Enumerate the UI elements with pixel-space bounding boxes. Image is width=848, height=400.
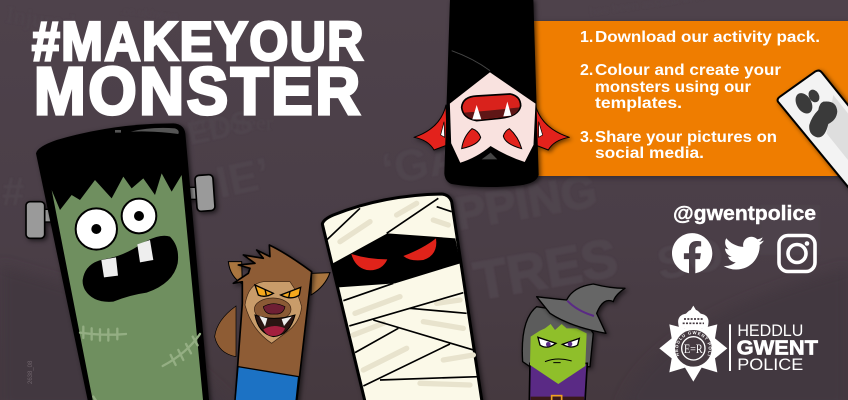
body: [444, 0, 539, 187]
hair highlight: [452, 51, 490, 71]
step 3: [580, 129, 777, 162]
faint newspaper background: SO: [653, 227, 727, 290]
step 2: 2.: [580, 62, 593, 79]
bandage shading: [340, 203, 473, 385]
step 2: monsters using our: [595, 79, 751, 96]
scar stitches: [80, 327, 200, 400]
faint newspaper background: IE’: [212, 149, 275, 208]
wordmark: POLICE: [737, 355, 803, 374]
handle: @gwentpolice: [673, 203, 816, 225]
werewolf monster: [215, 245, 330, 400]
crown: [678, 306, 709, 328]
title line 1: #MAKEYOUR: [32, 11, 365, 73]
star badge: [659, 306, 728, 382]
eyes and frown: [538, 337, 579, 363]
snout: [254, 298, 291, 321]
belt: [531, 397, 584, 400]
faint newspaper background: TRES: [470, 228, 622, 312]
wordmark: HEDDLU: [737, 321, 803, 340]
face: [530, 324, 587, 384]
body and head: [233, 245, 312, 400]
neck bolts: [26, 174, 215, 238]
frankenstein monster: [26, 123, 215, 400]
icon: instagram: [779, 236, 815, 272]
icon: twitter: [724, 237, 764, 270]
social media block: [672, 203, 816, 273]
face: [449, 72, 536, 163]
panel background: [530, 21, 848, 176]
wordmark: [737, 321, 818, 374]
step 3: Share your pictures on: [595, 129, 777, 146]
ears: [228, 262, 330, 295]
step 2: [580, 62, 781, 112]
witch monster: [522, 284, 625, 400]
divider: [729, 324, 731, 371]
eye band: [332, 233, 460, 287]
title: [32, 11, 365, 128]
cape wings: [414, 105, 569, 150]
faint newspaper background: EDS: [184, 103, 256, 152]
artwork reference code: 2638_08: [28, 360, 34, 384]
mouth and teeth: [83, 236, 178, 302]
faint newspaper background: [2, 0, 820, 312]
head and body: [36, 123, 209, 400]
star badge: HEDDLU GWENT POLICE: [675, 331, 712, 356]
step 1: 1.: [580, 29, 593, 46]
eyes: [462, 129, 522, 149]
icon: facebook: [672, 233, 712, 273]
wrapped body: [322, 194, 482, 400]
eyes: [255, 285, 301, 298]
Gwent Police logo: [659, 306, 818, 382]
dress: [529, 363, 587, 400]
hat: [537, 284, 625, 333]
ring: [674, 329, 712, 367]
title line 2: MONSTER: [34, 54, 363, 128]
step 3: social media.: [595, 145, 704, 162]
nose: [263, 304, 285, 314]
face patch: [245, 282, 302, 343]
tail: [215, 306, 236, 357]
trousers: [235, 367, 299, 400]
ghost monster: [778, 71, 848, 193]
step 1: Download our activity pack.: [595, 29, 820, 46]
vampire monster: [414, 0, 569, 187]
mouth: [255, 315, 295, 337]
star badge: E=R: [684, 342, 703, 356]
step 2: templates.: [595, 95, 682, 112]
wordmark: GWENT: [737, 336, 818, 359]
faint newspaper background: Injured: [4, 2, 76, 38]
faint newspaper background: .co.uk/news: [120, 5, 179, 23]
orange instructions panel: [530, 21, 848, 176]
mummy monster: [322, 194, 482, 400]
hair highlight: [115, 128, 179, 134]
red eyes: [351, 238, 436, 270]
faint newspaper background: ‘GA: [378, 133, 464, 195]
eyes: [76, 199, 156, 250]
hair: [522, 307, 593, 367]
step 3: 3.: [580, 129, 593, 146]
faint newspaper background: PPING: [451, 164, 601, 240]
step 2: Colour and create your: [595, 62, 781, 79]
faint newspaper background: #: [2, 170, 24, 214]
paw print: [792, 88, 837, 137]
mouth and fangs: [462, 94, 521, 121]
faint newspaper background: volunteer: [190, 110, 274, 135]
bandage lines: [327, 198, 478, 386]
